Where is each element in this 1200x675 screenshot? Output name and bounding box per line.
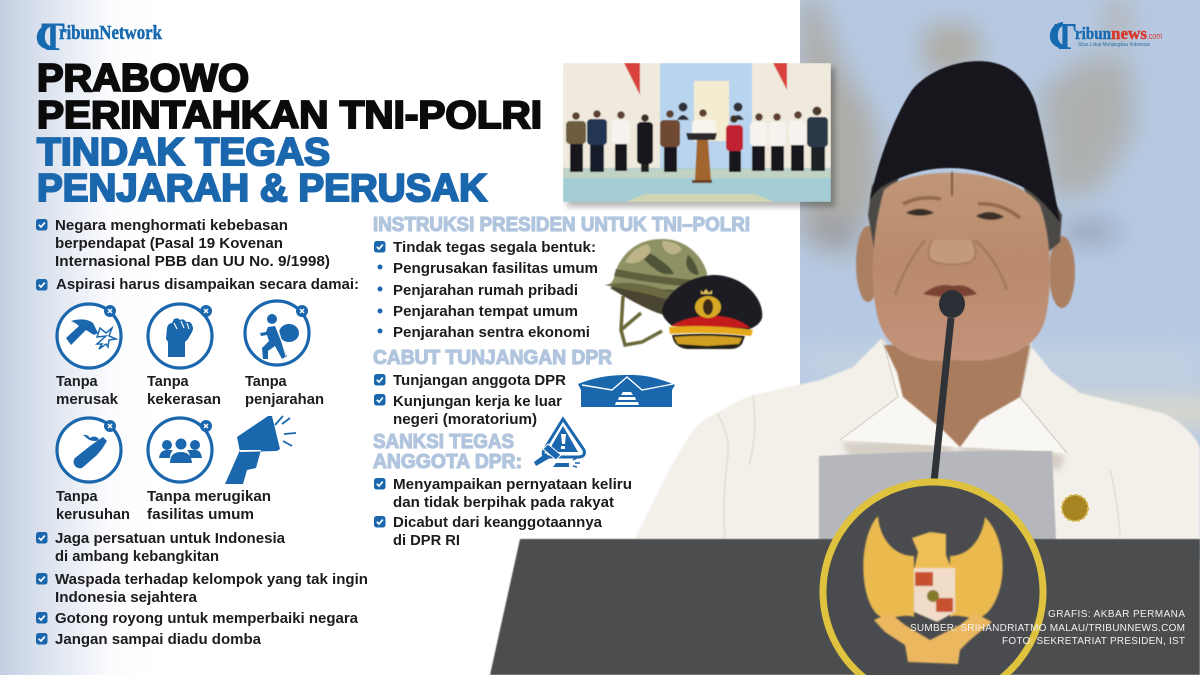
text block: peaceful aspiration: Aspirasi harus disampaikan secara damai: (56, 277, 359, 293)
icon: fist, tanpa kekerasan (147, 304, 221, 408)
icon: molotov, tanpa kerusuhan: kerusuhan (56, 507, 130, 523)
text block: lower checklist: di ambang kebangkitan (55, 549, 219, 565)
logo: Tribunnews: Situs Lokal Menjangkau Indonesia (1078, 42, 1151, 48)
icon: hammer, tanpa merusak (56, 304, 121, 408)
icon: DPR building (578, 375, 675, 407)
icon: warning gavel (534, 419, 584, 467)
credits: GRAFIS: AKBAR PERMANA (1048, 609, 1185, 620)
icon: crowd, tanpa merugikan fasilitas umum: fasilitas umum (147, 507, 254, 523)
text block: sanksi list: dan tidak berpihak pada rakyat (393, 495, 614, 511)
icon: hammer, tanpa merusak: merusak (56, 392, 119, 408)
title: PENJARAH & PERUSAK (37, 167, 487, 210)
text block: lower checklist: Waspada terhadap kelompok yang tak ingin (55, 572, 368, 588)
icon: looter, tanpa penjarahan (245, 301, 324, 408)
credits: FOTO: SEKRETARIAT PRESIDEN, IST (1002, 636, 1185, 647)
text block: instruksi list: Penjarahan tempat umum (393, 304, 578, 320)
logo: TribunNetwork: T (41, 14, 65, 59)
left white panel (0, 0, 800, 675)
microphone (934, 290, 965, 482)
hat (870, 61, 1060, 222)
text block: sanksi list: di DPR RI (393, 533, 460, 549)
text block: lower checklist (36, 531, 368, 648)
text block: freedom of expression: berpendapat (Pasal 19 Kovenan (55, 236, 283, 252)
icon: looter, tanpa penjarahan: penjarahan (245, 392, 324, 408)
heading: cabut tunjangan: CABUT TUNJANGAN DPR (373, 347, 613, 369)
text block: freedom of expression: Internasional PBB dan UU No. 9/1998) (55, 254, 330, 270)
icon: megaphone (225, 416, 296, 484)
paper on lectern (819, 451, 1056, 540)
text block: instruksi list: Penjarahan sentra ekonomi (393, 325, 590, 341)
photo background: blurred garuda (800, 0, 1200, 560)
text block: lower checklist: Jangan sampai diadu domba (55, 632, 262, 648)
heading: sanksi tegas: SANKSI TEGAS (373, 431, 514, 453)
credits (910, 609, 1185, 647)
ears (856, 226, 880, 302)
heading: instruksi presiden: INSTRUKSI PRESIDEN UNTUK TNI–POLRI (373, 214, 750, 236)
logo: Tribunnews: news (1111, 24, 1147, 43)
icon: crowd, tanpa merugikan fasilitas umum (147, 418, 271, 523)
people (566, 106, 828, 172)
text block: sanksi list: Dicabut dari keanggotaannya (393, 515, 603, 531)
text block: tunjangan list: negeri (moratorium) (393, 412, 537, 428)
hair (868, 170, 1062, 252)
lectern (490, 539, 1200, 675)
title (37, 57, 542, 210)
text block: tunjangan list: Kunjungan kerja ke luar (393, 394, 562, 410)
text block: sanksi list (374, 477, 632, 549)
title: PERINTAHKAN TNI-POLRI (37, 94, 542, 137)
logo: TribunNetwork (37, 14, 163, 59)
text block: instruksi list: Pengrusakan fasilitas umum (393, 261, 598, 277)
icon: police cap (662, 275, 762, 349)
text block: freedom of expression (36, 218, 330, 270)
logo: Tribunnews: .com (1147, 31, 1162, 41)
icon: army helmet (605, 239, 707, 345)
icon: hammer, tanpa merusak: Tanpa (56, 374, 99, 390)
text block: tunjangan list: Tunjangan anggota DPR (393, 373, 567, 389)
garuda (863, 516, 1003, 664)
icon: fist, tanpa kekerasan: Tanpa (147, 374, 190, 390)
shirt (634, 338, 1200, 545)
lapel pin (1062, 495, 1088, 521)
logo: Tribunnews: ribun (1075, 24, 1111, 43)
heading: sanksi tegas: ANGGOTA DPR: (373, 451, 522, 473)
collar shadow (842, 428, 1065, 470)
icon: fist, tanpa kekerasan: kekerasan (147, 392, 221, 408)
heading: sanksi tegas (373, 431, 522, 473)
text block: lower checklist: Indonesia sejahtera (55, 590, 198, 606)
emblem: garuda (823, 482, 1043, 675)
photo: speaker Prabowo (634, 61, 1200, 545)
title: PRABOWO (37, 57, 249, 100)
text block: sanksi list: Menyampaikan pernyataan keliru (393, 477, 632, 493)
text block: tunjangan list (374, 373, 567, 428)
text block: instruksi list: Penjarahan rumah pribadi (393, 283, 578, 299)
inset photo: president with officials (563, 63, 835, 207)
facial features (895, 172, 1020, 297)
credits: SUMBER: SRIHANDRIATMO MALAU/TRIBUNNEWS.COM (910, 623, 1185, 634)
collar (840, 338, 1067, 453)
text block: lower checklist: Gotong royong untuk memperbaiki negara (55, 611, 359, 627)
logo: TribunNetwork: ribunNetwork (59, 22, 163, 44)
neck (884, 345, 1030, 447)
logo: Tribunnews (1050, 16, 1162, 58)
icon: looter, tanpa penjarahan: Tanpa (245, 374, 288, 390)
title: TINDAK TEGAS (37, 131, 330, 174)
icon: crowd, tanpa merugikan fasilitas umum: Tanpa merugikan (147, 489, 271, 505)
icon: molotov, tanpa kerusuhan (56, 418, 130, 523)
logo: Tribunnews: T (1054, 16, 1076, 58)
face (873, 173, 1050, 361)
text block: lower checklist: Jaga persatuan untuk Indonesia (55, 531, 286, 547)
icon: molotov, tanpa kerusuhan: Tanpa (56, 489, 99, 505)
text block: instruksi list (374, 240, 598, 341)
text block: instruksi list: Tindak tegas segala bentuk: (393, 240, 596, 256)
lectern in inset (686, 133, 717, 140)
text block: freedom of expression: Negara menghormati kebebasan (55, 218, 288, 234)
